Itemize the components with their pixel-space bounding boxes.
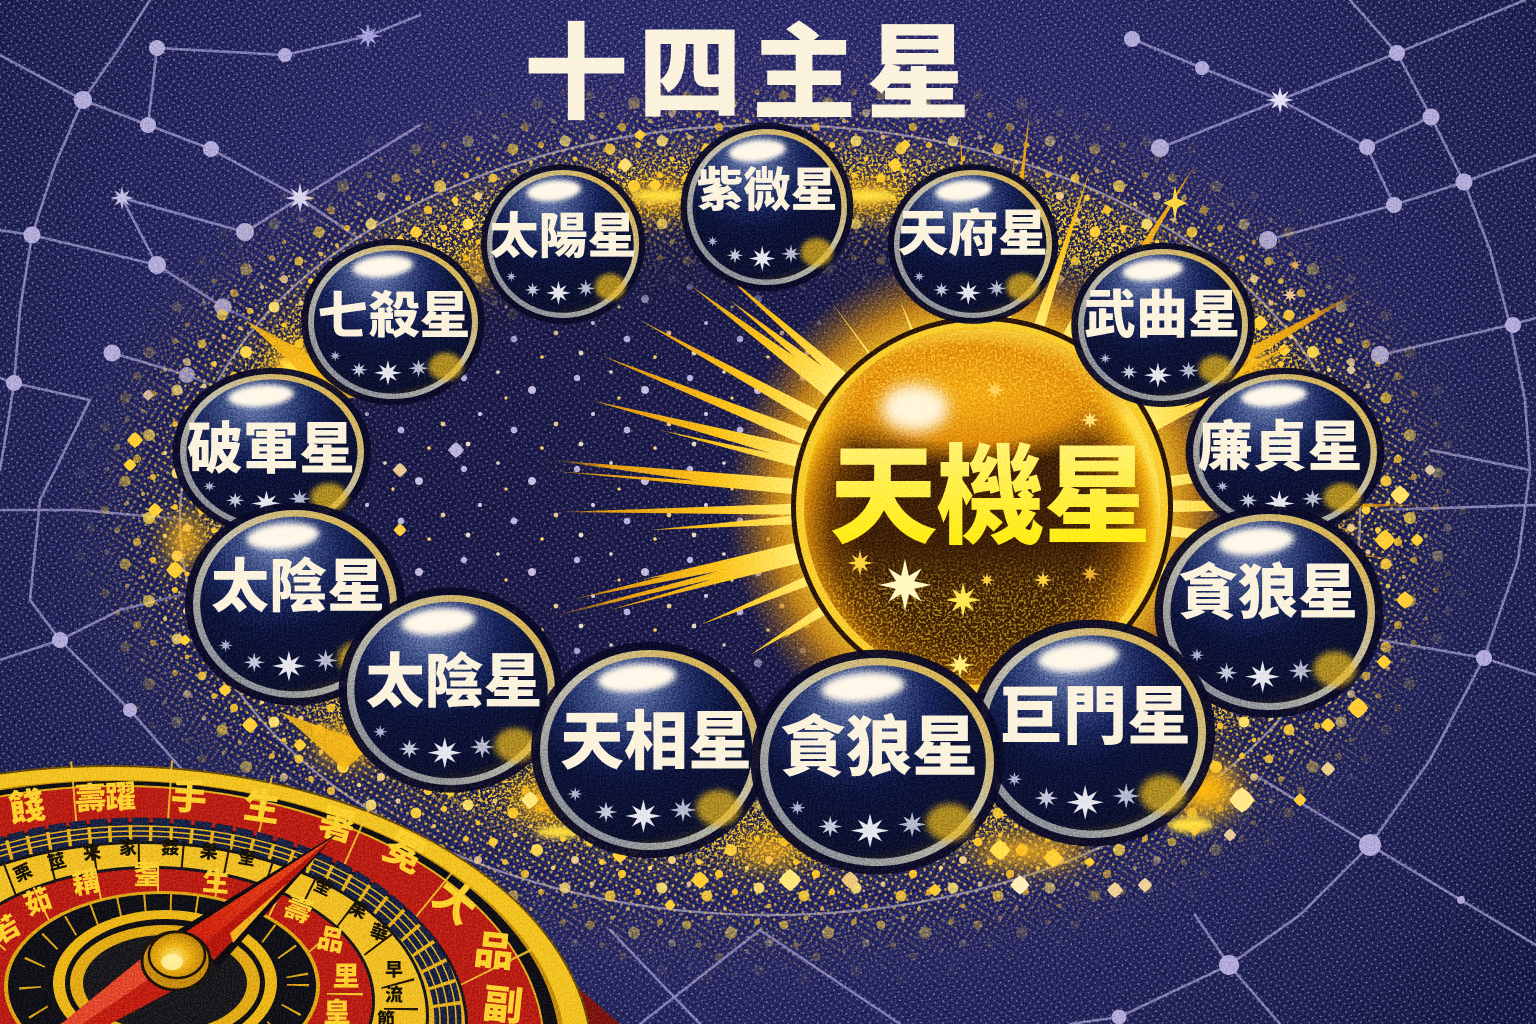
sphere: 太陰星 (left): 太陰星: [211, 554, 385, 620]
sphere: 天相星: 天相星: [560, 706, 752, 778]
trigram band: [0, 822, 468, 1024]
gold dial rings: [53, 910, 277, 1024]
sphere: 天相星: [531, 642, 769, 858]
yellow band characters: 栗: [11, 860, 35, 886]
yellow band characters: 奎: [236, 847, 258, 869]
inner band characters: 生: [201, 866, 231, 898]
yellow band characters: [11, 837, 403, 1024]
central golden sphere: 天機星: [790, 316, 1180, 700]
inner band characters: 里: [332, 962, 360, 992]
sphere: 武曲星: 武曲星: [1084, 287, 1240, 345]
gold star scatter: [124, 129, 1436, 911]
outer rims: [0, 766, 592, 1024]
yellow band characters: 奎: [311, 874, 335, 900]
label: 天機星: 天機星: [829, 436, 1151, 558]
needle hub: [142, 932, 210, 990]
yellow band characters: 流: [385, 984, 403, 1005]
yellow character band: [0, 841, 429, 1024]
star spheres ring: [173, 123, 1384, 874]
sphere: 貪狼星 (bottom): 貪狼星: [780, 710, 978, 784]
outer guide ellipse: [180, 125, 1360, 915]
outer red band: [0, 786, 544, 1024]
sphere: 巨門星: [969, 620, 1215, 846]
dark cloth behind compass: [560, 985, 620, 1024]
yellow band characters: 姦: [161, 837, 179, 858]
yellow band characters: 早: [385, 960, 403, 980]
outer band characters: 壽躍: [74, 779, 137, 817]
sphere: 破軍星: [173, 368, 371, 536]
dark halo behind gold ring: [175, 160, 1375, 870]
outer band characters: 手: [170, 775, 208, 819]
sphere: 貪狼星 (bottom): [751, 650, 1003, 874]
yellow band characters: 華: [367, 921, 391, 945]
sphere: 太陰星 (lower): 太陰星: [365, 649, 543, 715]
inner band characters: 耋: [134, 860, 160, 890]
gold glow pockets between spheres: [169, 183, 1275, 865]
sphere: 破軍星: 破軍星: [187, 418, 355, 480]
sphere: 巨門星: 巨門星: [999, 681, 1191, 753]
yellow band characters: 家: [119, 837, 137, 858]
sphere: 天府星: [888, 164, 1058, 324]
outer band characters: 大: [424, 871, 486, 933]
inner band characters: 耩: [70, 866, 102, 900]
sphere: 七殺星: [301, 239, 485, 405]
sphere: 貪狼星 (right): [1155, 506, 1383, 718]
outer band characters: [6, 775, 525, 1024]
yellow band characters: 莖: [45, 849, 68, 874]
inner band characters: [0, 860, 360, 1024]
needle: [61, 834, 336, 1024]
inner red band: [0, 866, 375, 1024]
compass: [0, 766, 592, 1024]
sphere: 太陽星: 太陽星: [489, 210, 637, 264]
black dial: [4, 891, 320, 1024]
outer band characters: 生: [241, 784, 283, 830]
sphere: 太陰星 (left): [185, 502, 405, 706]
sphere: 廉貞星: [1186, 368, 1384, 536]
sphere: 七殺星: 七殺星: [317, 288, 471, 344]
sphere: 紫微星: [681, 123, 853, 291]
outer band characters: 品: [472, 928, 516, 976]
sphere: 廉貞星: 廉貞星: [1197, 416, 1363, 478]
sphere: 天府星: 天府星: [898, 206, 1048, 262]
sphere: 太陽星: [481, 164, 645, 324]
outer band characters: 餞: [6, 784, 48, 830]
sphere: 太陰星 (lower): [339, 587, 563, 793]
sphere: 紫微星: 紫微星: [696, 164, 838, 216]
outer band characters: 署: [314, 801, 360, 849]
title: 十四主星: [524, 17, 980, 133]
inner band characters: 壽: [280, 891, 316, 929]
central glow and light rays: [245, 110, 1445, 770]
yellow band characters: 来: [82, 841, 102, 864]
sphere: 武曲星: [1071, 243, 1255, 407]
outer band characters: 冕: [376, 824, 432, 882]
yellow band characters: 果: [199, 841, 219, 863]
sphere: 貪狼星 (right): 貪狼星: [1178, 560, 1358, 626]
inner band characters: 品: [315, 923, 347, 957]
inner band characters: 茹: [20, 883, 56, 921]
yellow band characters: 果: [346, 897, 370, 923]
